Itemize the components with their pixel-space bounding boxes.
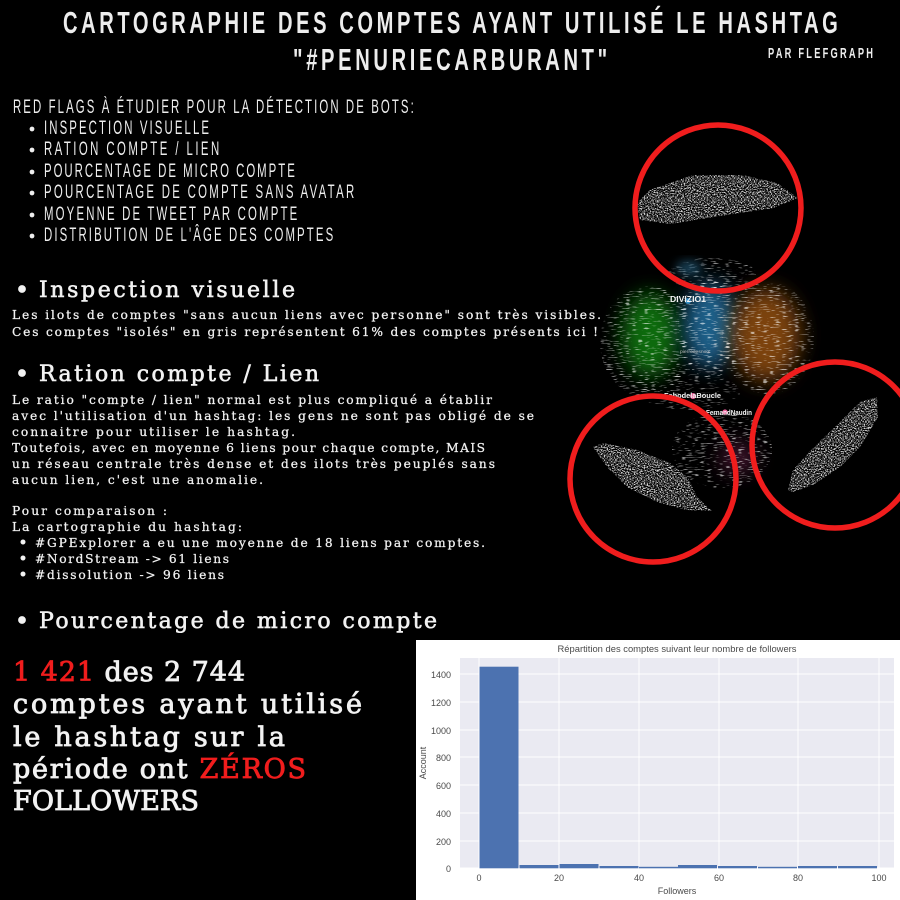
title: "#PENURIECARBURANT"	[293, 44, 607, 77]
y axis labels: 200	[436, 837, 451, 847]
x axis labels: 100	[871, 873, 887, 883]
red flags list: MOYENNE DE TWEET PAR COMPTE	[44, 204, 297, 225]
text: comparaison: La cartographie du hashtag:	[12, 520, 242, 534]
callout: zero followers: période ont ZÉROS	[13, 752, 306, 785]
text: inspection visuelle: Les ilots de comptes "sans aucun liens avec personne" sont très visibles.	[12, 308, 601, 322]
callout: zero followers: le hashtag sur la	[13, 722, 285, 753]
y axis labels: 400	[436, 809, 451, 819]
network graph	[600, 258, 814, 488]
text: ration compte / lien: avec l'utilisation d'un hashtag: les gens ne sont pas obligé de se	[12, 409, 534, 423]
callout: zero followers	[13, 657, 362, 817]
red circle: top	[635, 125, 801, 291]
title	[63, 6, 838, 77]
x axis labels: 40	[634, 873, 644, 883]
red circle: right	[752, 362, 900, 528]
red flags list: RED FLAGS À ÉTUDIER POUR LA DÉTECTION DE BOTS:	[13, 95, 414, 118]
y axis labels: 600	[436, 781, 451, 791]
heading: inspection visuelle: Inspection visuelle	[39, 278, 295, 303]
red flags list: RATION COMPTE / LIEN	[44, 139, 219, 160]
heading: ration compte / lien: Ration compte / Lien	[39, 362, 319, 387]
x axis labels: 20	[554, 873, 564, 883]
chart title: Répartition des comptes suivant leur nombre de followers	[558, 644, 797, 654]
cluster: pink	[640, 374, 772, 488]
text: ration compte / lien	[12, 393, 534, 487]
node labels: pierrodesnoix	[680, 349, 711, 354]
red flags list: POURCENTAGE DE COMPTE SANS AVATAR	[44, 182, 354, 203]
cluster: orange	[722, 282, 814, 394]
island: top cluster	[637, 175, 798, 224]
x axis labels: 0	[476, 873, 482, 883]
callout: zero followers: FOLLOWERS	[13, 786, 199, 817]
x axis title: Followers	[658, 886, 697, 896]
text: ration compte / lien: un réseau centrale très dense et des ilots très peuplés sans	[12, 457, 495, 471]
text: comparaison: #GPExplorer a eu une moyenne de 18 liens par comptes.	[35, 536, 485, 550]
cluster: green	[600, 286, 696, 398]
node labels: DIVIZIO1	[670, 295, 707, 304]
node labels: FabodelaBoucle	[664, 393, 721, 400]
red flags list: INSPECTION VISUELLE	[44, 118, 209, 139]
title: CARTOGRAPHIE DES COMPTES AYANT UTILISÉ LE HASHTAG	[63, 6, 838, 40]
text: ration compte / lien: Toutefois, avec en moyenne 6 liens pour chaque compte, MAIS	[12, 441, 485, 455]
text: comparaison: #NordStream -> 61 liens	[35, 552, 229, 566]
y axis labels: 0	[446, 864, 451, 874]
island: right cluster	[788, 397, 878, 492]
text: comparaison: #dissolution -> 96 liens	[35, 568, 224, 582]
bar chart	[416, 640, 900, 900]
y axis title: Account	[418, 746, 428, 779]
text: ration compte / lien: Le ratio "compte / lien" normal est plus compliqué a établir	[12, 393, 492, 407]
cluster: blue	[668, 258, 756, 378]
red flags list: POURCENTAGE DE MICRO COMPTE	[44, 161, 295, 182]
x axis labels: 60	[714, 873, 724, 883]
node labels: FernandNaudin	[706, 410, 752, 417]
y axis labels	[431, 670, 451, 874]
y axis labels: 1200	[431, 698, 451, 708]
red circle: left	[570, 396, 736, 562]
x axis labels: 80	[793, 873, 803, 883]
heading: pourcentage de micro compte: Pourcentage de micro compte	[39, 609, 437, 634]
x axis labels	[476, 873, 887, 883]
y axis labels: 800	[436, 753, 451, 763]
byline: PAR FLEFGRAPH	[768, 45, 873, 62]
text: comparaison	[12, 504, 485, 582]
text: ration compte / lien: connaitre pour utiliser le hashtag.	[12, 425, 295, 439]
island: left cluster	[593, 443, 712, 511]
callout: zero followers: 1 421 des 2 744	[13, 657, 245, 688]
text: inspection visuelle	[12, 308, 601, 339]
red flags list: DISTRIBUTION DE L'ÂGE DES COMPTES	[44, 223, 333, 246]
text: comparaison: Pour comparaison :	[12, 504, 167, 518]
red flags list	[13, 95, 414, 246]
bars	[480, 667, 877, 868]
text: inspection visuelle: Ces comptes "isolés" en gris représentent 61% des comptes présents ici !	[12, 325, 598, 339]
text: ration compte / lien: aucun lien, c'est une anomalie.	[12, 473, 263, 487]
node labels	[664, 295, 752, 417]
y axis labels: 1000	[431, 726, 451, 736]
y axis labels: 1400	[431, 670, 451, 680]
callout: zero followers: comptes ayant utilisé	[13, 689, 362, 720]
